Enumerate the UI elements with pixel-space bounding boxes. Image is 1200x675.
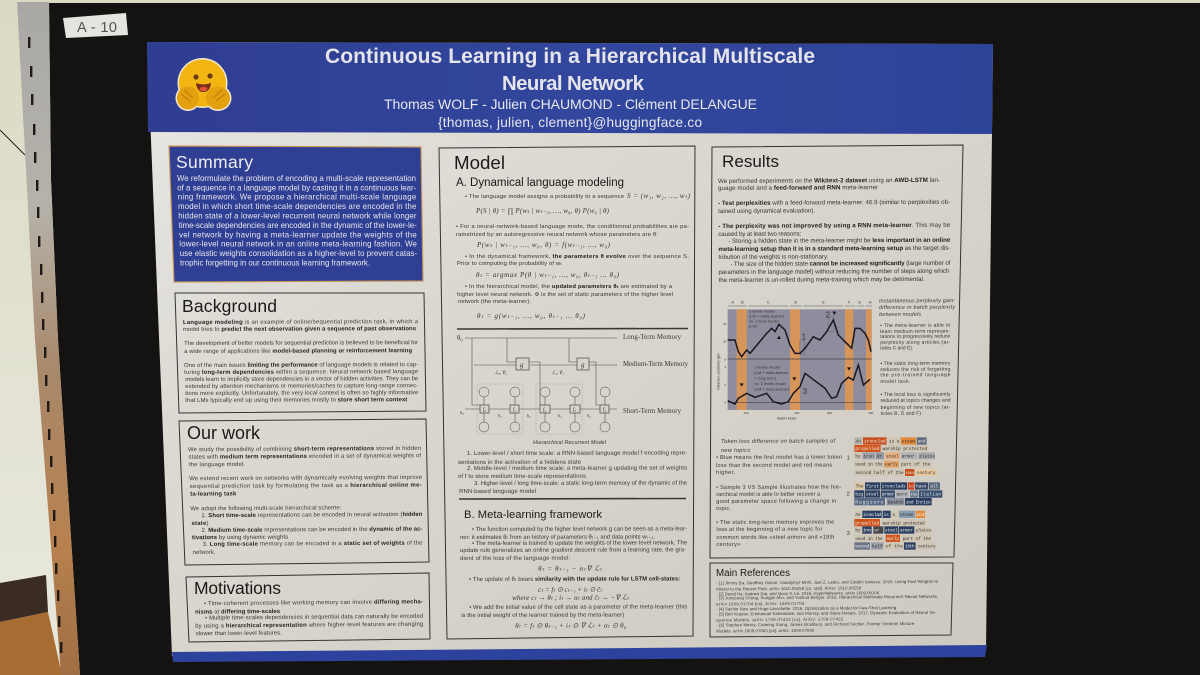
text: summary body: trophic forgetting in our continuous learning framework. (180, 258, 370, 267)
text: token loss notes: Token loss difference on batch samples of (721, 439, 836, 445)
text: summary body: vel network by having a meta-learner update the weights of the (179, 230, 417, 239)
text: background body: extended by attention mechanisms or memories/caches to capture long-range connec- (185, 383, 418, 390)
sample 1: is a (889, 440, 900, 445)
sample 3: plates (916, 529, 932, 534)
text: token loss notes: • The static long-term memory improves the (716, 520, 834, 526)
diagram: hierarchical recurrent model: Long-Term Memory (623, 334, 682, 341)
sample 1: or (877, 454, 882, 459)
text: three levels: 2. Middle-level / medium time scale: a meta-learner g updating the set of weights (467, 466, 687, 472)
text: our work body: We extend recent work on networks with dynamically evolving weights that improve (189, 475, 423, 482)
chart: instantaneous perplexity gain: D (794, 300, 797, 305)
sample 2: have (916, 485, 927, 490)
text and formulas: section A: • In the hierarchical model, the updated parameters θₜ are estimated by a (465, 284, 673, 290)
text and formulas: section B: cₜ = fₜ ⊙ cₜ₋₁ + iₜ ⊙ c̃ₜ (538, 586, 603, 594)
text: token loss notes: common words like «steel armor» and «19th (716, 535, 834, 541)
text and formulas: section A: Prior to computing the probability of wₜ (457, 261, 562, 267)
sample 3: a (892, 513, 895, 518)
sample 2: ironclads (882, 485, 906, 490)
chart: instantaneous perplexity gain: vs. 1 level model (749, 319, 779, 324)
text: our work body: 2. Medium time-scale representations can be encoded in the dynamic of the ac- (201, 527, 423, 534)
sample 1: An (856, 440, 861, 445)
diagram: hierarchical recurrent model: h₀ (460, 410, 464, 415)
chart: instantaneous perplexity gain: vs. 2 levels model (754, 381, 786, 386)
text and formulas: section B: • The update of θₜ bears similarity with the update rule for LSTM cell-states: (469, 576, 680, 583)
text: token loss notes: • Sample 3 VS Sample illustrates how the hie- (716, 485, 841, 491)
text: motivations body: slower than lower-level features. (196, 631, 282, 637)
chart: instantaneous perplexity gain: 3 (803, 387, 808, 396)
text and formulas: section A: • For a neural-network-based language mode, the conditionnal probabilities are pa- (456, 224, 689, 230)
poster number tag: A - 10 (77, 20, 117, 36)
sample 2: and Enrico (906, 500, 931, 505)
chart: instantaneous perplexity gain: (LM + meta-learner) (754, 387, 790, 392)
chart: instantaneous perplexity gain: 20 (723, 340, 727, 344)
chart: instantaneous perplexity gain: 40 (723, 322, 727, 326)
text: background body: One of the main issues limiting the performance of language models is related to cap- (184, 362, 418, 369)
diagram: hierarchical recurrent model: g (581, 361, 585, 369)
sample 2: steel (866, 493, 879, 498)
sample 3 (847, 511, 937, 550)
text and formulas: section A: • In the dynamical framework, the parameters θ evolve over the sequence S. (465, 254, 689, 260)
text: references list: Attend to the Recent Past. arXiv 1610.06258 [cs, stat]. ArXiv: 1610.06258 (716, 585, 862, 591)
text: three levels: RNN-based language model (459, 489, 536, 495)
text and formulas: section A: rametrized by an autoregressive neural network whose parameters are θ: (456, 232, 658, 238)
chart: instantaneous perplexity gain: F (848, 300, 851, 305)
diagram: hierarchical recurrent model: h₄ (587, 413, 591, 418)
text: three levels (458, 451, 688, 495)
chart: instantaneous perplexity gain: (LM + meta-learner) (749, 314, 785, 319)
sample 3: protected (903, 521, 925, 526)
chart: instantaneous perplexity gain: E (822, 300, 825, 305)
text: results body: - Test perplexities with a feed-forward meta-learner: 46.9 (similar to perplexities ob- (718, 199, 950, 207)
text and formulas: section B: θₜ = fₜ ⊙ θₜ₋₁ + iₜ ⊙ ∇ ℒₜ + αₜ ⊙ θ₀ (515, 622, 627, 630)
heading: our work: Our work (187, 423, 261, 443)
text: references list: - [5] Ben Krause, Emmanuel Kahembwe, Iain Murray, and Steve Renals. 2017. Dynamic Evaluation of Neural Se- (716, 610, 937, 616)
text: chart notes: • The static long-term memory (880, 361, 951, 367)
heading: background: Background (182, 296, 277, 316)
text and formulas: section B: θₜ = θₜ₋₁ − αₜ∇ ℒₜ (538, 565, 603, 573)
text: our work body (188, 446, 423, 556)
panel: results (710, 145, 963, 558)
text and formulas: section A: P(S | θ) = ∏ P(wₜ | wₜ₋₁, …, w₀, θ) P(w₀ | θ) (475, 207, 610, 215)
sample 3: 3 (847, 531, 850, 537)
chart: instantaneous perplexity gain (717, 300, 874, 421)
text and formulas: section A: network (the meta-learner). (458, 299, 531, 305)
sample 2: Ruggiero (855, 500, 884, 505)
text: chart notes: learn medium-term represen- (880, 329, 951, 335)
text: summary body: of a sequence in a language model by casting it in a continuous lear- (177, 183, 417, 192)
sample 3: propelled (855, 521, 879, 526)
text: token loss notes (716, 439, 842, 548)
heatmap: token loss samples (847, 437, 942, 550)
text: three levels: of f to store medium time-scale representations (458, 474, 586, 480)
sample 3: and (916, 513, 925, 518)
sample 2: 2 (847, 492, 850, 498)
text: results body (718, 177, 951, 284)
sample 3: steam (900, 513, 913, 518)
header banner (147, 42, 993, 134)
text: our work body: ta-learning task (190, 491, 237, 498)
text: summary body: lower-level neural network in an online meta-learning fashion. We (179, 240, 418, 249)
authors: Thomas WOLF - Julien CHAUMOND - Clément DELANGUE (384, 96, 757, 112)
sample 2: Italian (920, 493, 941, 498)
chart: instantaneous perplexity gain: (LM + meta-learner (754, 370, 789, 375)
sample 2: Dandolo (888, 500, 904, 505)
text and formulas: section B: ner: it estimates θₜ from an history of parameters θₜ₋₁ and data points wₜ₋₁. (460, 534, 655, 541)
sample 1: plates (919, 454, 935, 459)
text: token loss notes: good parameter space following a change in (716, 499, 836, 505)
text: our work body: We adopt the following multi-scale hierarchical scheme: (190, 505, 342, 512)
text: chart notes: ticles B, D and F). (881, 411, 923, 417)
text: token loss notes: century» (716, 542, 740, 548)
diagram: hierarchical recurrent model: f₁ (513, 408, 516, 413)
text: results body: - Storing a hidden state in the meta-learner might be less important in an online (728, 237, 951, 245)
text: chart notes: the pre-trained language (880, 372, 951, 378)
panel: main references (710, 563, 953, 637)
text: summary body: ning framework. We propose a hierarchical multi-scale language (178, 193, 417, 202)
chart: instantaneous perplexity gain: Batch index (777, 417, 797, 421)
text: chart notes: between models (879, 312, 921, 318)
chart: instantaneous perplexity gain: 1 (802, 332, 807, 341)
sample 3: century (918, 545, 936, 550)
text: summary body: use elastic weights consolidation as a higher-level to prevent catas- (180, 249, 417, 258)
chart: instantaneous perplexity gain: 0 (724, 401, 726, 405)
chart: instantaneous perplexity gain: (LM) (749, 324, 758, 329)
text: chart notes: tations to progressively reduce (880, 334, 950, 340)
sample 3: 19th (905, 545, 915, 550)
text: references list: arXiv 1609.01704 [cs]. ArXiv: 1609.01704 (716, 601, 805, 606)
heading: main references: Main References (716, 568, 790, 579)
caption: hierarchical recurrent model: Hierarchical Recurrent Model (533, 440, 607, 446)
text and formulas: section A: S = (w₁, w₂, …, wₜ) (627, 192, 691, 200)
panel: motivations (186, 573, 430, 642)
sample 2: armor (882, 493, 895, 498)
sample 1: armor (902, 454, 915, 459)
icon: hugging face logo (176, 58, 232, 111)
text: results body: caused by at least two reasons: (718, 231, 802, 238)
text: background body (183, 319, 419, 404)
text: our work body: 3. Long time-scale memory can be encoded in a static set of weights of the (203, 541, 423, 548)
text: motivations body (195, 599, 423, 637)
sample 1: part of the (901, 463, 931, 468)
sample 3: iron (863, 529, 871, 534)
panel: background (175, 293, 426, 413)
sample 1: by (855, 454, 861, 459)
diagram: hierarchical recurrent model: h₁ (498, 413, 502, 418)
sample 2: big (855, 493, 864, 498)
text: our work body: sequential prediction task by formulating the task as a hierarchical online me- (190, 483, 422, 490)
sample 1: steel (886, 454, 899, 459)
text: our work body: state) (191, 521, 209, 527)
sample 3: An (855, 513, 861, 518)
text: summary body: hidden state of a lower-level recurrent neural network while longer (178, 211, 417, 220)
sample 2: The (856, 485, 864, 490)
text: chart notes: model task. (880, 379, 910, 385)
text: results body: tained using dynamical evaluation). (718, 207, 815, 215)
sample 3: warship (883, 521, 901, 526)
sample 3: of the (885, 545, 903, 550)
text: motivations body: • Multiple time-scales dependencies in sequential data can naturally be encoded (205, 614, 423, 622)
title: Continuous Learning in a Hierarchical Multiscale (325, 45, 815, 68)
chart: instantaneous perplexity gain: 0 (724, 357, 726, 361)
chart: instantaneous perplexity gain: 2 (826, 311, 831, 320)
text: references list (716, 579, 939, 633)
sample 3: is (884, 513, 889, 518)
text: background body: The development of better models for sequential prediction is believed to be beneficial for (184, 340, 418, 347)
diagram: hierarchical recurrent model (457, 334, 689, 434)
heading: results: Results (722, 152, 779, 171)
text and formulas: section B: • The function computed by the higher level network g can be seen as a meta-lear- (472, 526, 687, 533)
text: chart notes: • The local loss is significantly (880, 392, 951, 398)
text and formulas: section B: is the initial weight of the learner trained by the meta-learner) (461, 613, 624, 619)
text: motivations body: • Time-coherent processes like working memory can involve differing mecha- (204, 599, 423, 607)
text: background body: models learn to implicitly store dependencies in a vector of hidden activities. They can be (185, 376, 419, 383)
text: chart notes: Instantaneous perplexity gain: (879, 298, 956, 304)
sample 2: all (930, 485, 939, 490)
text: our work body: the language model. (189, 462, 245, 468)
sample 2: first (866, 485, 879, 490)
chart: instantaneous perplexity gain: B (741, 300, 744, 305)
text: background body: Language modeling is an example of online/sequential prediction task, in which a (183, 319, 419, 326)
text: references list: - [6] Stephen Merity, Caiming Xiong, James Bradbury, and Richard Socher. Pointer Sentinel Mixture (716, 621, 915, 627)
text: references list: quence Models. arXiv 1709.07432 [cs]. ArXiv: 1709.07432 (716, 616, 844, 622)
sample 1: warship (883, 447, 901, 452)
text and formulas: section A: θₜ = argmax P(θ | wₜ₋₁, …, w₀, θₜ₋₁ … θ₀) (476, 271, 620, 279)
text and formulas: section A: P(wₜ | wₜ₋₁, …, w₀, θ) = f(wₜ₋₁, …, w₀) (476, 241, 611, 249)
sample 1: early (885, 463, 898, 468)
sample 1: and (918, 440, 926, 445)
text: chart notes: • The meta-learner is able to (880, 323, 950, 329)
text and formulas: section B: dient of the loss of the language model: (460, 556, 570, 562)
text: references list: - [3] Junyoung Chung, Sungjin Ahn, and Yoshua Bengio. 2016. Hierarchical Multiscale Recurrent Neural Networks. (716, 594, 938, 600)
text: results body: guage model and a feed-forward and RNN meta-learner (718, 184, 878, 192)
sample 1: century (917, 471, 936, 476)
text and formulas: section A: • The language model assigns a probability to a sequence (465, 194, 625, 200)
text: token loss notes: loss at the beginning of a new topic for (716, 527, 822, 533)
text: summary body: time-scale dependencies are encoded in the dynamic of the lower-le- (179, 221, 417, 230)
sample 1: 1 (847, 455, 850, 461)
panel: our work (179, 419, 429, 565)
text: three levels: 1. Lower-level / short time scale: a RNN-based language model f encoding repre- (467, 451, 687, 457)
sample 2: to (909, 485, 914, 490)
chart: instantaneous perplexity gain: 4 (724, 365, 726, 369)
text and formulas: section B (460, 526, 688, 630)
sample 1 (847, 437, 937, 476)
text: motivations body: by using a hierarchical representation where higher-level features are changing (195, 622, 423, 630)
text: token loss notes: topic. (716, 506, 732, 512)
metal rail with slots (17, 2, 80, 675)
text and formulas: section A: higher level neural network. Φ is the set of static parameters of the higher level (457, 292, 673, 298)
diagram: hierarchical recurrent model: h₂ (527, 413, 531, 418)
text and formulas: section A: θₜ = g(wₜ₋₁, …, w₀, θₜ₋₁ … θ₀) (477, 312, 586, 320)
text and formulas: section B: • The meta-learner is trained to update the weights of the lower-level network. The (472, 540, 688, 547)
poster number tag (63, 13, 128, 38)
sample 1: second half of the (855, 471, 904, 476)
sample 3: part of the (903, 537, 931, 542)
panel: model (439, 146, 695, 639)
sample 3: or (874, 529, 880, 534)
text: token loss notes: new topics (721, 448, 750, 454)
text: references list: Models. arXiv 1609.07843 [cs]. arXiv: 1609.07843 (716, 628, 815, 633)
diagram: hierarchical recurrent model: ℒ₀, ∇₀ (495, 370, 507, 376)
heading: summary: Summary (176, 152, 253, 172)
chart: instantaneous perplexity gain: H (869, 300, 872, 305)
text: results body: the meta-learner is un-rolled during meta-training which may be detrimental. (719, 276, 925, 284)
text: references list: - [1] Jimmy Ba, Geoffrey Hinton, Volodymyr Mnih, Joel Z. Leibo, and Catalin Ionescu. 2016. Using Fast Weights to (716, 579, 939, 585)
diagram: hierarchical recurrent model: h₃ (558, 413, 562, 418)
text and formulas: section A (456, 192, 691, 320)
diagram: hierarchical recurrent model: Short-Term Memory (623, 408, 682, 415)
sample 1: used in the (855, 463, 883, 468)
title: Neural Network (502, 73, 645, 95)
text: results body: tribution of the weights is non-stationary. (718, 253, 829, 261)
chart: instantaneous perplexity gain: 300 (827, 411, 832, 415)
text: background body: model tries to predict the next observation given a sequence of past observations (183, 326, 417, 333)
text: token loss notes: higher. (716, 470, 736, 476)
sample 1: ironclad (864, 440, 886, 445)
chart: instantaneous perplexity gain: C (767, 300, 770, 305)
text: results body: We performed experiments on the Wikitext-2 dataset using an AWD-LSTM lan- (718, 177, 940, 185)
chart: instantaneous perplexity gain: 400 (868, 411, 874, 415)
heading: motivations: Motivations (194, 578, 281, 598)
poster paper (147, 42, 993, 656)
heading: model: Model (454, 152, 505, 173)
text: references list: - [4] Sachin Ravi and Hugo Larochelle. 2016. Optimization as a Model for Few-Shot Learning (716, 605, 897, 611)
footer band (172, 645, 987, 662)
chart: instantaneous perplexity gain: G (858, 300, 861, 305)
sample 3: second (855, 545, 870, 550)
text and formulas: section B: update rule generalizes an online gradient descent rule from a learning rate, the gra- (460, 547, 686, 554)
text: results body: - The size of the hidden state cannot be increased significantly (large number of (730, 260, 951, 268)
text: our work body: network. (193, 550, 216, 556)
text: background body: tions more explicitly. Unfortunately, the very local context is often so highly informative (185, 390, 419, 397)
sample 1: 19th (906, 471, 914, 476)
chart: instantaneous perplexity gain: + long-term) (754, 375, 777, 380)
text: results body: parameters in the language model) without reducing the number of steps along which (718, 268, 950, 276)
heading: meta-learning framework: B. Meta-learning framework (464, 509, 602, 521)
text: motivations body: nisms at differing time-scales (195, 609, 281, 616)
text: three levels: 3. Higher-level / long time-scale: a static long-term memory of the dynamic of the (474, 481, 688, 487)
diagram: hierarchical recurrent model: f₀ (483, 408, 486, 413)
text: chart notes: ticles C and E). (880, 345, 913, 351)
sample 3: ironclad (863, 513, 881, 518)
heading: dynamical language modeling: A. Dynamical language modeling (456, 177, 624, 189)
sample 3: armor (900, 529, 913, 534)
diagram: hierarchical recurrent model: θ₀ (457, 335, 463, 342)
text: our work body: We study the possibility of combining short-term representations stored in hidden (188, 446, 421, 453)
sample 3: early (887, 537, 899, 542)
text: background body: a wide range of applications like model-based planning or reinforcement learning (184, 348, 413, 355)
text: background body: turing long-term dependencies within a sequence. Neural network based language (184, 369, 419, 376)
text: token loss notes: • Blue means the first model has a lower token (716, 455, 842, 461)
text: our work body: 1. Short time-scale representations can be encoded in neural activation (hidden (201, 512, 423, 519)
diagram: hierarchical recurrent model: f₂ (543, 408, 546, 413)
text: chart notes: reduced at topics changes and (881, 398, 951, 404)
diagram: hierarchical recurrent model: f₄ (603, 408, 606, 413)
text: summary body: model in which short time-scale dependencies are encoded in the (178, 202, 417, 211)
chart: instantaneous perplexity gain: 3 levels model (754, 365, 780, 370)
text: references list: - [2] David Ha, Andrew Dai, and Quoc V. Le. 2016. HyperNetworks. arXiv 1609.09106 (716, 590, 880, 596)
panel: summary (169, 146, 423, 282)
chart: instantaneous perplexity gain: 200 (794, 411, 800, 415)
text: summary body (177, 174, 418, 267)
text: summary body: We reformulate the problem of encoding a multi-scale representation (177, 174, 416, 183)
chart: instantaneous perplexity gain: Instantan. perplexity gain (717, 353, 721, 390)
chart: instantaneous perplexity gain: A (731, 300, 734, 305)
sample 2 (847, 482, 942, 505)
sample 3: used in the (855, 537, 883, 542)
diagram: hierarchical recurrent model: f₃ (573, 408, 576, 413)
text: chart notes (879, 298, 956, 417)
sample 2: were (897, 493, 907, 498)
text: chart notes: difference in batch perplexity (879, 305, 955, 311)
text: chart notes: reduces the risk of forgetting (880, 367, 951, 373)
chart: instantaneous perplexity gain: 2 (724, 383, 726, 387)
chart: instantaneous perplexity gain: 2 levels model (749, 309, 775, 314)
sample 1: steam (902, 440, 915, 445)
sample 2: the (911, 493, 917, 498)
text: background body: that LMs typically end up using their memories mostly to store short term context (185, 397, 407, 404)
text: our work body: tivations by using dynamic weights (192, 535, 288, 541)
text: chart notes: beginning of new topics (ar- (881, 405, 951, 411)
text: results body: - The perplexity was not improved by using a RNN meta-learner. This may be (718, 222, 951, 230)
text: three levels: sentations in the activation of a hiddens state (458, 460, 582, 466)
sample 1: protected (903, 447, 928, 452)
text: our work body: states with medium term representations encoded in a set of dynamical weights of (189, 453, 421, 461)
text: token loss notes: rarchical model is able to better recover a (716, 492, 821, 498)
sample 3: half (872, 545, 883, 550)
sample 1: iron (863, 454, 874, 459)
title (325, 45, 815, 95)
sample 3: steel (885, 529, 898, 534)
text: results body: meta-learning setup than it is in a standard meta-learning setup as the target dis- (718, 245, 950, 253)
emails: {thomas, julien, clement}@huggingface.co (438, 115, 702, 130)
text: token loss notes: loss than the second model and red means (716, 463, 832, 469)
chart: instantaneous perplexity gain: 100 (744, 411, 749, 415)
diagram: hierarchical recurrent model: g (520, 361, 524, 369)
sample 3: by (855, 529, 861, 534)
diagram: hierarchical recurrent model: Medium-Term Memory (623, 361, 689, 368)
text: chart notes: perplexity along articles (ar- (880, 340, 951, 346)
sample 1: propelled (855, 447, 880, 452)
text and formulas: section B: • We add the initial value of the cell state as a parameter of the meta-learner (this (469, 604, 687, 611)
diagram: hierarchical recurrent model: ℒ₁, ∇₁ (552, 370, 564, 376)
text and formulas: section B: where cₜ → θₜ ; iₜ → αₜ and c̃ₜ → −∇ ℒₜ (512, 594, 630, 602)
